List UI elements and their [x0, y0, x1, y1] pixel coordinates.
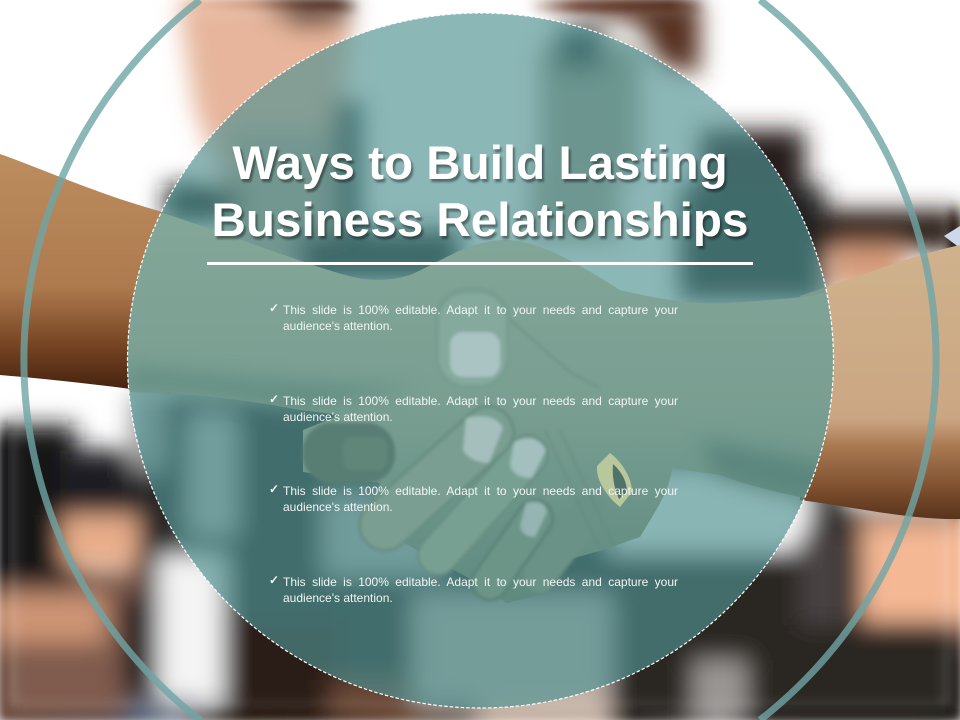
bullet 3: This slide is 100% editable. Adapt it to your needs and capture your audience's attention. [283, 484, 678, 514]
bullet 4: This slide is 100% editable. Adapt it to your needs and capture your audience's attention. [283, 575, 678, 605]
bullet 1: This slide is 100% editable. Adapt it to your needs and capture your audience's attention. [283, 303, 678, 333]
bullet 4: ✓ [269, 573, 279, 587]
bullet 2: This slide is 100% editable. Adapt it to your needs and capture your audience's attention. [283, 394, 678, 424]
teal circle panel [128, 13, 834, 708]
handshake seen through the circle [120, 198, 840, 603]
bullet 1: ✓ [269, 301, 279, 315]
title [212, 137, 750, 250]
right arm with shirt cuff [800, 226, 960, 519]
title underline [207, 262, 753, 265]
icon: gold ring [597, 453, 632, 507]
bullet 3: ✓ [269, 482, 279, 496]
left arm [0, 154, 170, 394]
bullet 2: ✓ [269, 392, 279, 406]
title: Business Relationships [212, 194, 748, 247]
dashed circle outline [128, 13, 834, 708]
title: Ways to Build Lasting [232, 137, 728, 190]
